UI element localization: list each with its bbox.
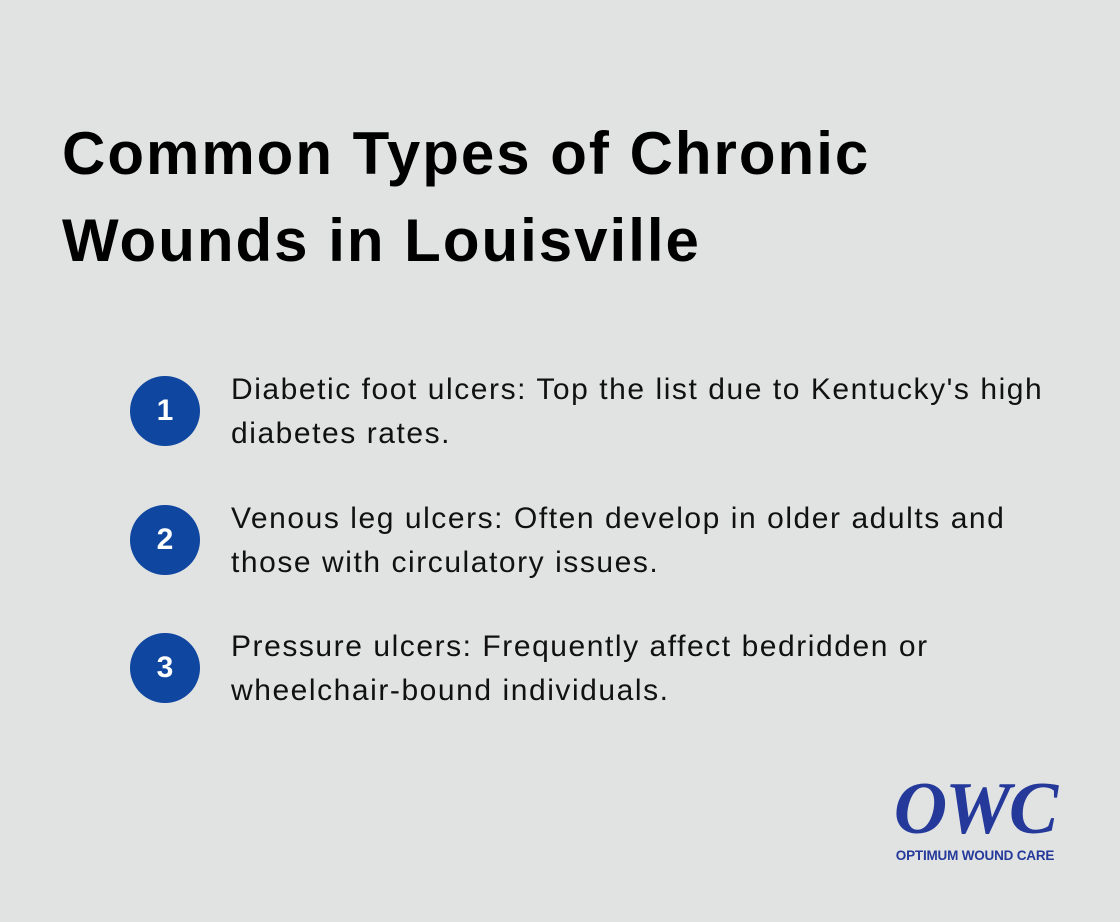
text 2 <box>231 502 1005 579</box>
item 3 <box>130 630 929 707</box>
logo: OWC <box>894 768 1056 850</box>
text 3: wheelchair-bound individuals. <box>231 674 670 707</box>
text 3: Pressure ulcers: Frequently affect bedridden or <box>231 630 929 663</box>
number 3: 3 <box>157 651 173 684</box>
item 2 <box>130 502 1005 579</box>
logo: OPTIMUM WOUND CARE <box>896 848 1054 863</box>
text 1: diabetes rates. <box>231 417 451 450</box>
number 1 <box>130 376 200 446</box>
number 2: 2 <box>157 523 173 556</box>
number 3 <box>130 633 200 703</box>
title <box>62 120 870 274</box>
number 1: 1 <box>157 394 173 427</box>
text 1 <box>231 373 1043 450</box>
text 2: those with circulatory issues. <box>231 546 659 579</box>
title: Common Types of Chronic <box>62 120 870 187</box>
text 2: Venous leg ulcers: Often develop in older adults and <box>231 502 1005 535</box>
number 2 <box>130 505 200 575</box>
title: Wounds in Louisville <box>62 207 701 274</box>
text 1: Diabetic foot ulcers: Top the list due to Kentucky's high <box>231 373 1043 406</box>
item 1 <box>130 373 1043 450</box>
text 3 <box>231 630 929 707</box>
